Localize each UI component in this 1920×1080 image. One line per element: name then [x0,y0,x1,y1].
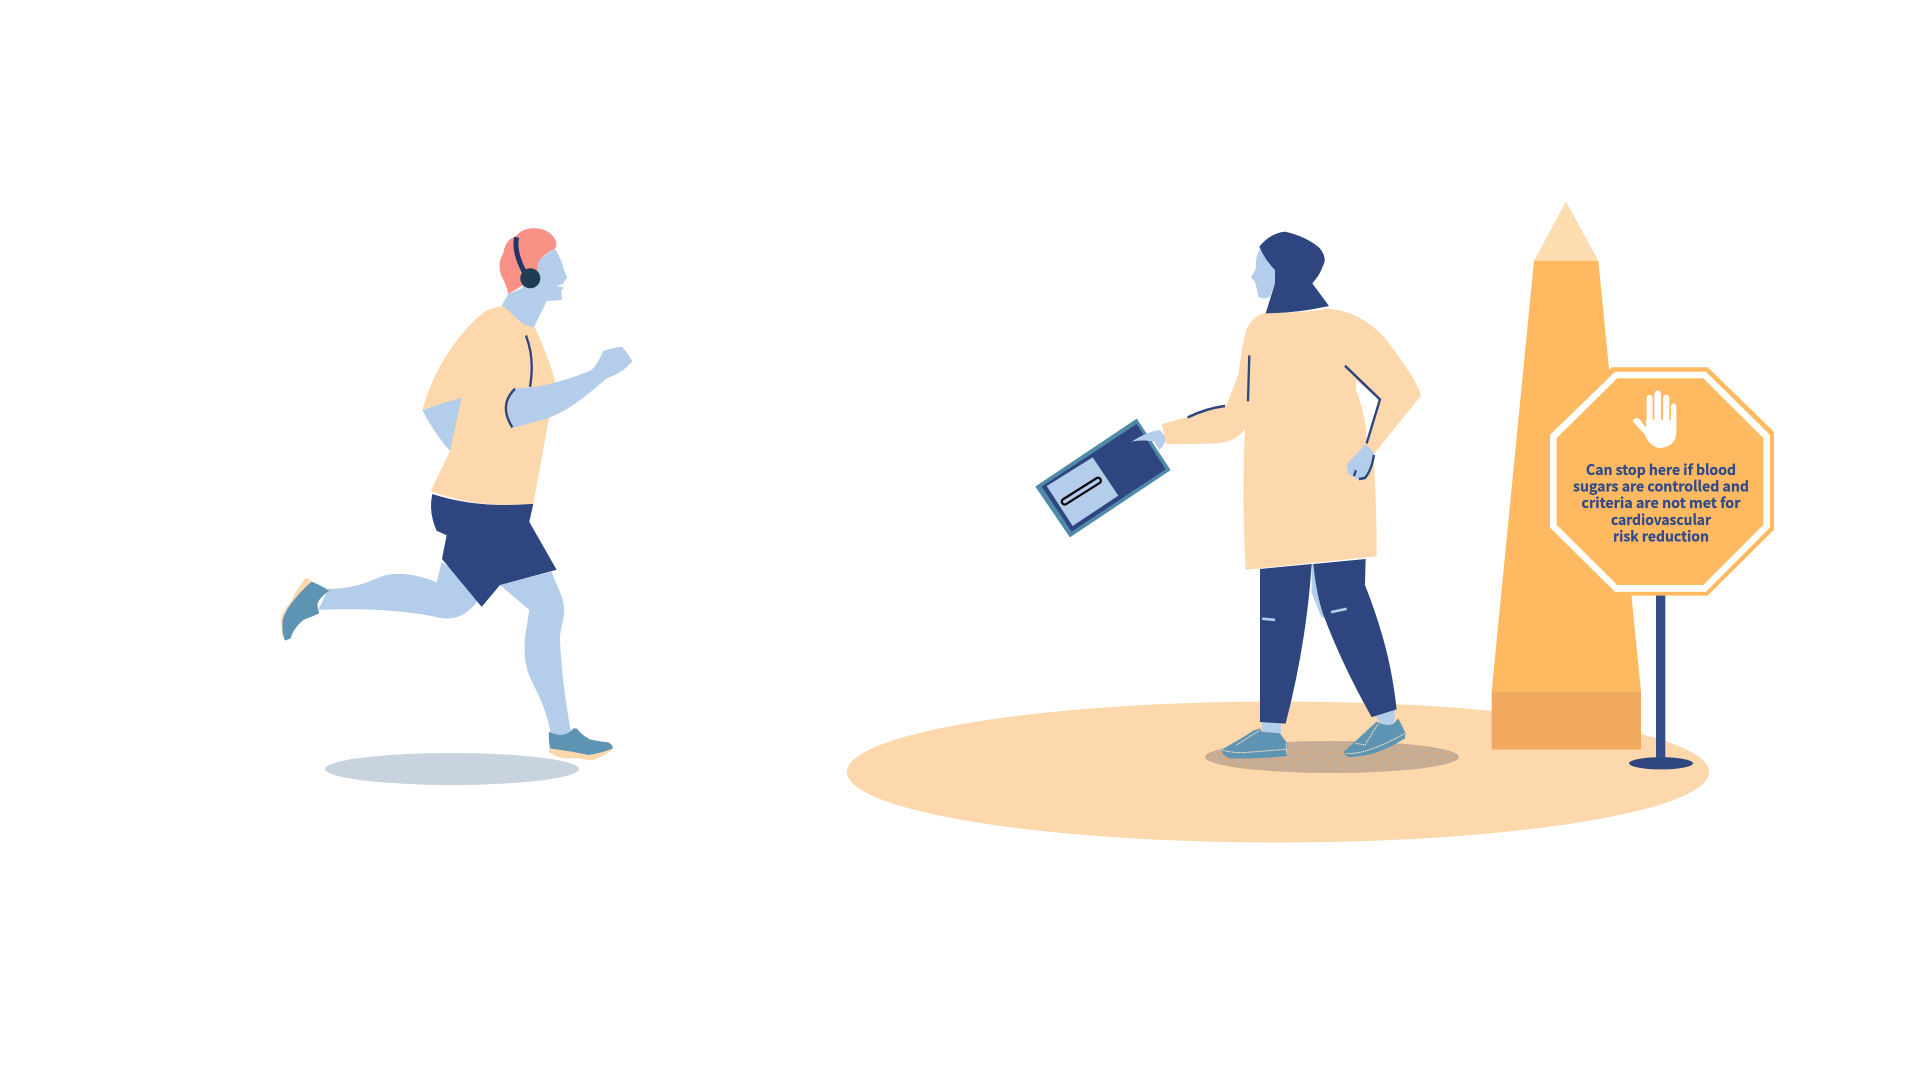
runner back arm [422,397,463,451]
left sock [1262,720,1281,733]
sign text: Can stop here if blood [1586,459,1736,480]
pillar tip [1534,201,1598,261]
left trouser leg [1260,564,1312,724]
sign outer edge [1549,367,1774,596]
headphone ear cup [520,268,540,288]
runner back leg [318,562,487,618]
runner front shoe [548,728,614,760]
monument and stop sign [1492,201,1774,769]
coat [1162,309,1421,570]
woman right shoe [1344,718,1406,757]
pillar base [1492,691,1641,750]
runner ground shadow [325,753,579,785]
runner hair [500,228,556,294]
sign text: sugars are controlled and [1573,476,1749,497]
runner sleeve line [506,389,515,427]
woman holding hand [1132,430,1167,450]
hijab [1259,232,1329,313]
sign text: criteria are not met for [1582,492,1741,513]
woman ground shadow [1205,741,1459,773]
runner front arm [508,347,632,428]
runner back shoe [281,578,329,641]
trouser knee marks [1262,609,1347,620]
icon: stop hand [1633,391,1676,448]
sign text: risk reduction [1613,526,1709,547]
runner figure [281,228,632,785]
right sock [1376,709,1395,725]
sign post foot [1629,757,1693,769]
coat arm lines [1188,355,1380,443]
arm gap [1356,380,1380,443]
runner shirt seam [526,336,532,387]
runner shorts [431,494,557,607]
sign white ring [1550,372,1770,592]
sign post [1656,594,1665,760]
sign text [1573,459,1749,547]
headphone band [516,237,525,273]
right trouser leg [1313,559,1397,717]
woman leg gap [1312,564,1325,618]
woman hip hand [1347,444,1374,480]
fingers lines [1354,455,1374,479]
ground ellipse [847,702,1709,842]
runner front leg [500,572,572,737]
woman face [1251,249,1275,298]
woman left shoe [1222,728,1287,759]
tablet [1036,419,1170,537]
sign text: cardiovascular [1611,509,1712,530]
woman figure [1036,232,1459,773]
runner t-shirt [422,306,555,505]
pillar body [1492,261,1641,691]
runner neck and face [502,248,567,328]
sign face [1557,378,1763,585]
